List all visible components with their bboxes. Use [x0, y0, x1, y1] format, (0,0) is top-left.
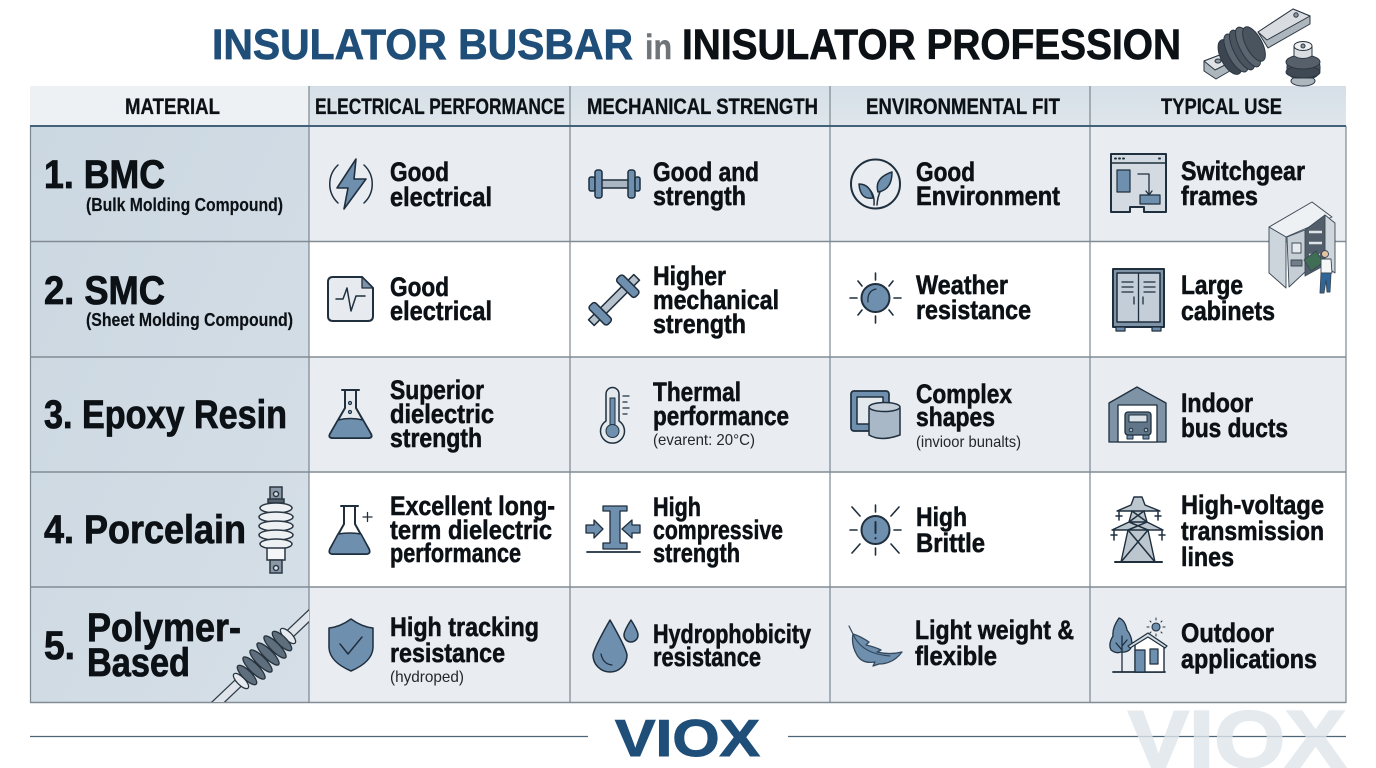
material: BMC	[44, 153, 283, 215]
text: thermal performance	[653, 377, 789, 449]
text: good and strength	[653, 157, 759, 211]
text: excellent long-term dielectric performance: term dielectric	[390, 515, 552, 545]
text: large cabinets: Large	[1181, 270, 1243, 300]
text: high compressive strength: High	[653, 492, 701, 522]
material: BMC: 1. BMC	[44, 153, 165, 197]
icon: waveform document	[328, 277, 373, 321]
header row: ELECTRICAL PERFORMANCE	[315, 94, 565, 119]
text: good electrical row 2: Good	[390, 272, 449, 302]
text: superior dielectric strength: dielectric	[390, 399, 494, 429]
icon: feather	[849, 626, 902, 666]
text: hydrophobicity resistance: Hydrophobicity	[653, 619, 811, 649]
icon: flask with bubbles	[329, 390, 372, 438]
header row: ENVIRONMENTAL FIT	[866, 94, 1060, 119]
title: INSULATOR BUSBAR	[212, 21, 633, 69]
text: good and strength: Good and	[653, 157, 759, 187]
text: outdoor applications: Outdoor	[1181, 618, 1274, 648]
text: thermal performance: Thermal	[653, 377, 741, 407]
text: high tracking resistance	[390, 612, 539, 686]
text: complex shapes: (invioor bunalts)	[916, 434, 1021, 451]
icon: switchgear frame	[1111, 154, 1166, 212]
icon: dumbbell	[589, 170, 640, 198]
icon: sun weather	[850, 273, 901, 323]
text: good environment	[916, 157, 1060, 211]
title: INISULATOR PROFESSION	[682, 21, 1181, 69]
text: high brittle: High	[916, 502, 967, 532]
material: Polymer-Based: Polymer-	[87, 606, 241, 650]
title	[212, 21, 1181, 69]
text: high tracking resistance: High tracking	[390, 612, 539, 642]
icon: complex shapes	[851, 391, 900, 438]
column: electrical performance	[328, 157, 555, 686]
text: light weight flexible: flexible	[915, 641, 997, 671]
VIOX logo: VIOX	[615, 710, 760, 768]
text: good electrical	[390, 157, 492, 212]
text: high brittle: Brittle	[916, 528, 985, 558]
text: high tracking resistance: (hydroped)	[390, 669, 464, 686]
text: high tracking resistance: resistance	[390, 638, 505, 668]
illustration: busbar with insulators	[1204, 9, 1320, 86]
material: SMC	[44, 269, 293, 330]
text: excellent long-term dielectric performance: Excellent long-	[390, 491, 555, 521]
text: indoor bus ducts	[1181, 388, 1288, 443]
text: light weight flexible: Light weight &	[915, 615, 1074, 645]
text: thermal performance: performance	[653, 401, 789, 431]
text: higher mechanical strength	[653, 261, 779, 339]
icon: lightning bolt	[330, 159, 372, 209]
text: high compressive strength: strength	[653, 538, 740, 568]
header row: MECHANICAL STRENGTH	[587, 94, 818, 119]
text: higher mechanical strength: mechanical	[653, 285, 779, 315]
text: superior dielectric strength	[390, 375, 494, 453]
text: indoor bus ducts: Indoor	[1181, 388, 1253, 418]
icon: diagonal dumbbell	[582, 268, 646, 332]
text: good electrical: electrical	[390, 182, 492, 212]
icon: garage with bus	[1109, 387, 1166, 442]
material: SMC: (Sheet Molding Compound)	[86, 310, 293, 330]
material: BMC: (Bulk Molding Compound)	[86, 195, 283, 215]
icon: shield	[329, 619, 373, 671]
header row: TYPICAL USE	[1161, 94, 1282, 119]
text: hydrophobicity resistance: resistance	[653, 642, 761, 672]
text: good environment: Good	[916, 157, 975, 187]
column: environmental fit	[849, 157, 1074, 671]
table background panel	[30, 86, 1346, 703]
column: mechanical strength	[582, 157, 811, 672]
text: excellent long-term dielectric performance	[390, 491, 555, 568]
material: Porcelain: 4. Porcelain	[44, 508, 246, 552]
icon: compression column	[586, 506, 640, 552]
illustration: open cabinet with technician	[1269, 202, 1335, 293]
material: Polymer-Based: 5.	[44, 624, 75, 668]
text: complex shapes	[916, 379, 1021, 451]
icon: large cabinet	[1113, 269, 1164, 331]
text: large cabinets	[1181, 270, 1275, 326]
text: weather resistance: resistance	[916, 295, 1031, 325]
text: large cabinets: cabinets	[1181, 296, 1275, 326]
text: high-voltage transmission lines: High-voltage	[1181, 490, 1324, 520]
text: switchgear frames	[1181, 156, 1305, 211]
header row: MATERIAL	[125, 94, 220, 119]
text: outdoor applications: applications	[1181, 644, 1317, 674]
text: complex shapes: shapes	[916, 402, 995, 432]
text: good electrical: Good	[390, 157, 449, 187]
text: hydrophobicity resistance	[653, 619, 811, 672]
text: good environment: Environment	[916, 181, 1060, 211]
text: good electrical row 2: electrical	[390, 296, 492, 326]
text: excellent long-term dielectric performance: performance	[390, 538, 521, 568]
text: higher mechanical strength: strength	[653, 309, 746, 339]
text: good electrical row 2	[390, 272, 492, 326]
header row	[125, 94, 1282, 119]
text: switchgear frames: Switchgear	[1181, 156, 1305, 186]
text: superior dielectric strength: Superior	[390, 375, 484, 405]
icon: leaf in circle	[851, 160, 900, 208]
text: switchgear frames: frames	[1181, 181, 1258, 211]
text: indoor bus ducts: bus ducts	[1181, 413, 1288, 443]
material: Polymer-Based: Based	[87, 641, 190, 685]
text: high compressive strength: compressive	[653, 515, 783, 545]
text: good and strength: strength	[653, 181, 746, 211]
text: thermal performance: (evarent: 20°C)	[653, 432, 755, 449]
column: typical use	[1109, 154, 1324, 674]
text: superior dielectric strength: strength	[390, 423, 482, 453]
icon: water drops	[593, 620, 638, 672]
material: SMC: 2. SMC	[44, 269, 165, 313]
text: weather resistance	[916, 270, 1031, 325]
text: light weight flexible	[915, 615, 1074, 671]
icon: erlenmeyer flask	[329, 506, 372, 554]
icon: warning sun	[850, 505, 901, 555]
text: complex shapes: Complex	[916, 379, 1012, 409]
icon: transmission tower	[1111, 497, 1165, 562]
icon: house and tree	[1110, 618, 1167, 672]
footer divider lines	[30, 736, 1346, 738]
material: Epoxy Resin: 3. Epoxy Resin	[44, 393, 287, 437]
text: high brittle	[916, 502, 985, 558]
text: high-voltage transmission lines: transmission	[1181, 516, 1324, 546]
title: in	[645, 28, 672, 67]
text: high-voltage transmission lines	[1181, 490, 1324, 572]
text: high compressive strength	[653, 492, 783, 568]
text: weather resistance: Weather	[916, 270, 1008, 300]
material: Polymer-Based	[44, 606, 241, 685]
text: higher mechanical strength: Higher	[653, 261, 726, 291]
illustration: polymer insulator	[212, 611, 314, 708]
text: outdoor applications	[1181, 618, 1317, 674]
illustration: porcelain insulator	[259, 487, 293, 573]
icon: thermometer	[600, 388, 629, 443]
text: high-voltage transmission lines: lines	[1181, 542, 1234, 572]
